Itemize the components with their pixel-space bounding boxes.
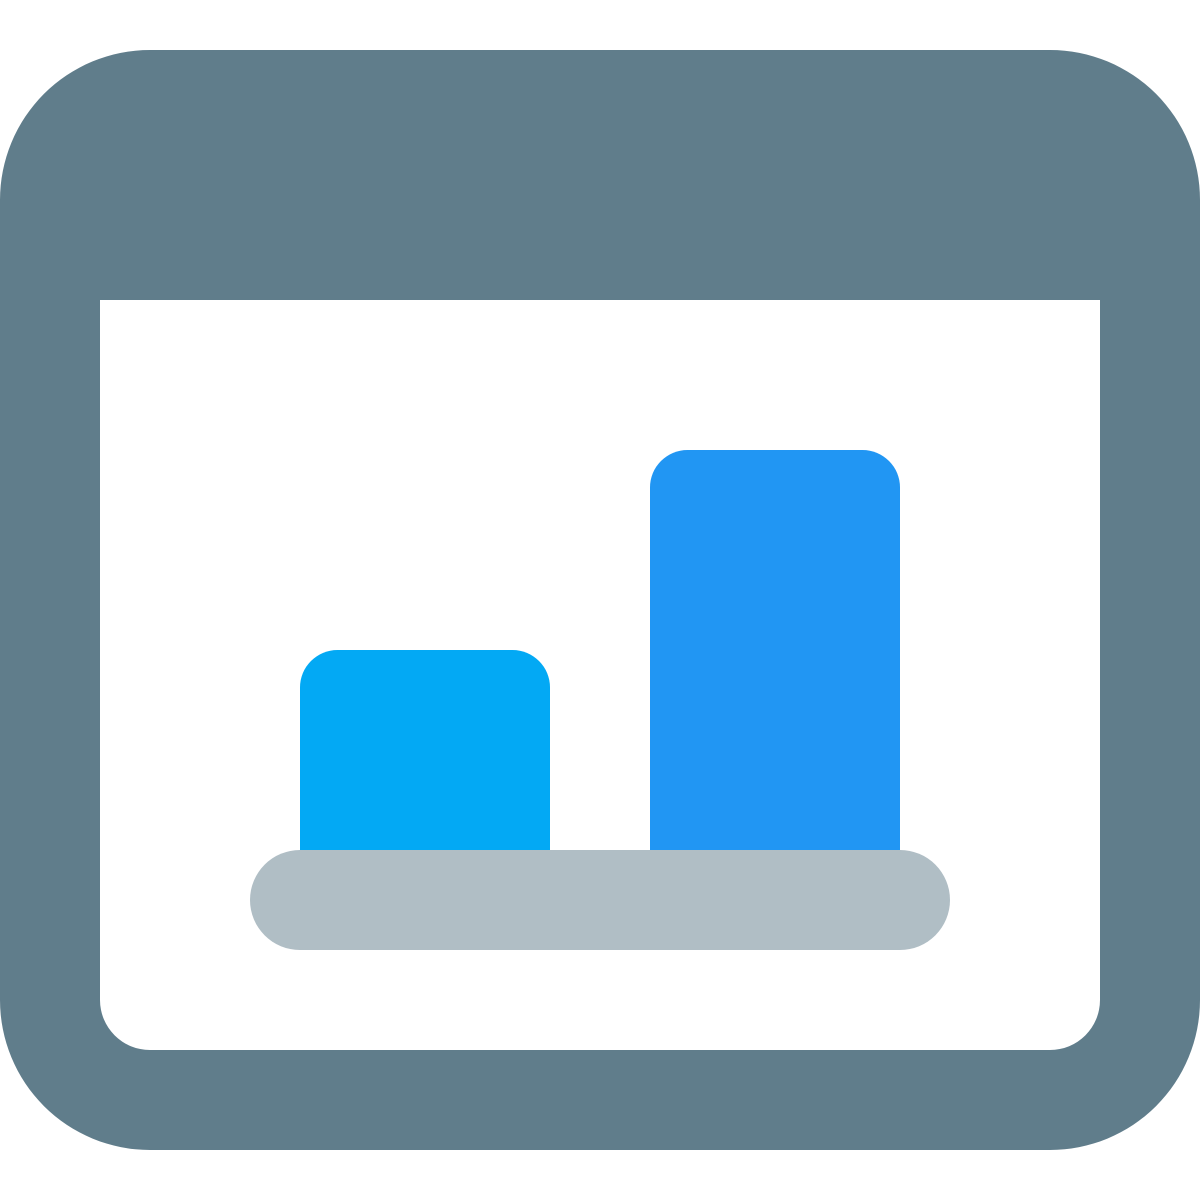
short bar	[300, 650, 550, 850]
tall bar	[650, 450, 900, 850]
chart baseline	[250, 850, 950, 950]
